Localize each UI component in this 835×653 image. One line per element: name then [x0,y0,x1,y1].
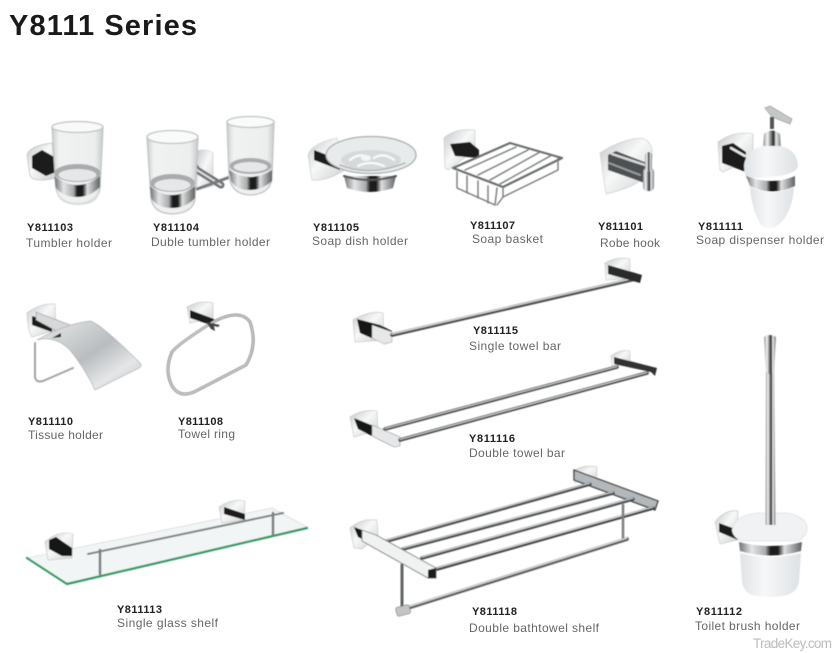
label: Y811111 [696,221,824,247]
label: Y811113: Y811113 [117,604,162,616]
icon: toilet brush holder [715,335,807,597]
watermark: TradeKey.com [753,636,832,651]
label: Y811105: Soap dish holder [312,234,408,248]
icon: towel ring [168,302,253,394]
label: Y811116 [469,433,565,460]
labels [26,220,824,635]
label: Y811110 [28,416,103,442]
label: Y811105: Y811105 [313,222,359,234]
title: Y8111 Series [9,10,197,42]
label: Y811103 [26,222,112,250]
label: Y811107 [470,220,544,246]
label: Y811103: Y811103 [27,222,73,234]
label: Y811108: Y811108 [178,416,223,428]
icon: soap basket [444,130,562,205]
label: Y811108: Towel ring [178,427,235,441]
icon: soap dispenser holder [718,106,798,228]
label: Y811107: Y811107 [470,220,515,232]
label: Y811118: Double bathtowel shelf [469,621,600,635]
label: Y811105 [312,222,408,248]
icon: single glass shelf [27,500,307,584]
label: Y811108 [178,416,235,441]
icon: soap dish holder [308,136,416,192]
icon: double tumbler holder [147,116,274,214]
label: Y811116: Y811116 [469,433,515,445]
label: Y811116: Double towel bar [469,446,565,460]
label: Y811103: Tumbler holder [26,236,112,250]
icon: double towel bar [350,351,657,447]
label: Y811110: Y811110 [28,416,73,428]
label: Y811110: Tissue holder [28,428,103,442]
label: Y811113 [117,604,219,630]
label: Y811118 [469,606,600,635]
label: Y811104: Duble tumbler holder [151,235,270,249]
icon: single towel bar [353,258,642,344]
label: Y811104: Y811104 [153,222,200,234]
label: Y811112: Y811112 [696,606,742,618]
label: Y811113: Single glass shelf [117,616,219,630]
label: Y811101: Y811101 [598,221,643,233]
icon: robe hook [600,138,654,194]
label: Y811104 [151,222,270,249]
icon: tumbler holder [27,122,103,205]
label: Y811115 [469,325,561,353]
label: Y811107: Soap basket [472,232,544,246]
label: Y811115: Y811115 [473,325,518,337]
label: Y811115: Single towel bar [469,339,561,353]
label: Y811111: Soap dispenser holder [696,233,824,247]
label: Y811111: Y811111 [698,221,743,233]
label: Y811112 [695,606,800,633]
label: Y811118: Y811118 [472,606,517,618]
label: Y811101: Robe hook [600,236,661,250]
icon: tissue holder [27,304,141,390]
label: Y811112: Toilet brush holder [695,619,800,633]
label: Y811101 [598,221,661,250]
icon: double bathtowel shelf [350,466,658,617]
